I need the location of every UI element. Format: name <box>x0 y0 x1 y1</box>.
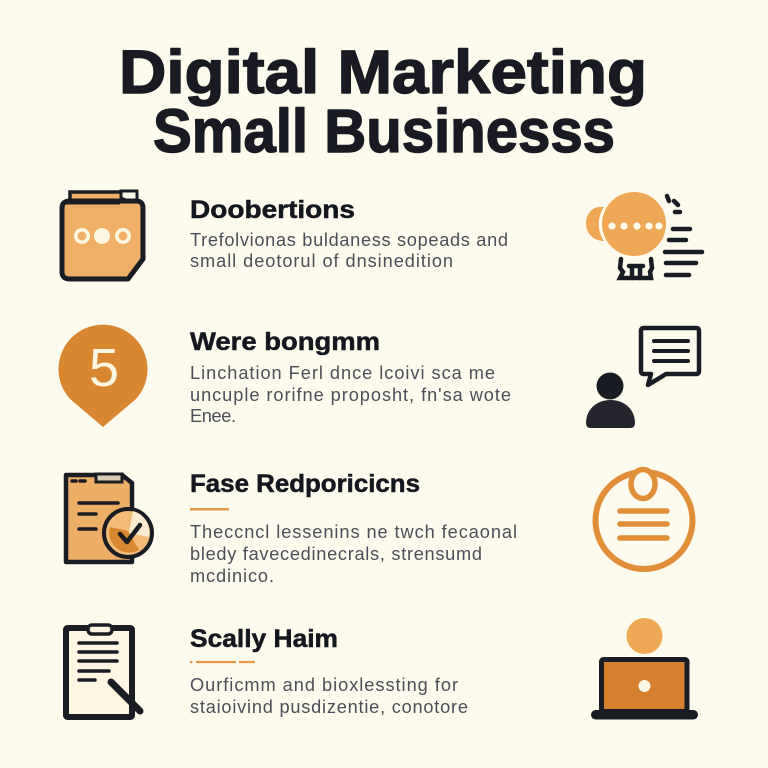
text block: Were bongmm <box>190 328 511 426</box>
icon: location pin with number <box>58 325 147 427</box>
title: Digital Marketing <box>119 38 647 106</box>
text block: Doobertions: Trefolvionas buldaness sopeads and <box>190 230 508 250</box>
text block: Were bongmm: uncuple rorifne proposht, fn'sa wote <box>190 385 511 405</box>
text block: Doobertions: small deotorul of dnsinedition <box>190 251 453 271</box>
text block: Scally Haim <box>190 625 468 717</box>
text block: Doobertions: Doobertions <box>190 196 355 224</box>
text block: Scally Haim: staioivind pusdizentie, conotore <box>190 697 468 717</box>
icon: speech head with lines <box>586 192 702 278</box>
icon: location pin with number: 5 <box>89 338 119 398</box>
icon: circle with lines <box>596 470 692 569</box>
icon: folder with dots <box>62 191 143 279</box>
title: Small Businesss <box>153 97 615 165</box>
text block: Fase Redporicicns <box>190 470 517 586</box>
text block: Fase Redporicicns: mcdinico. <box>190 566 274 586</box>
text block: Fase Redporicicns: Theccncl lessenins ne twch fecaonal <box>190 522 517 542</box>
text block: Scally Haim: Ourficmm and bioxlessting for <box>190 675 458 695</box>
text block: Were bongmm: Enee. <box>190 406 236 426</box>
text block: Were bongmm: Were bongmm <box>190 328 380 356</box>
text block: Scally Haim: Scally Haim <box>190 625 338 653</box>
icon: document with check badge <box>66 474 152 562</box>
text block: Fase Redporicicns: bledy favecedinecrals, strensumd <box>190 544 482 564</box>
icon: clipboard with pen <box>66 625 140 717</box>
text block: Fase Redporicicns: Fase Redporicicns <box>190 470 420 498</box>
title <box>119 38 647 165</box>
text block: Were bongmm: Linchation Ferl dnce lcoivi sca me <box>190 363 495 383</box>
icon: laptop with circle <box>591 618 698 720</box>
icon: person with speech bubble <box>586 328 699 428</box>
text block: Doobertions <box>190 196 508 271</box>
